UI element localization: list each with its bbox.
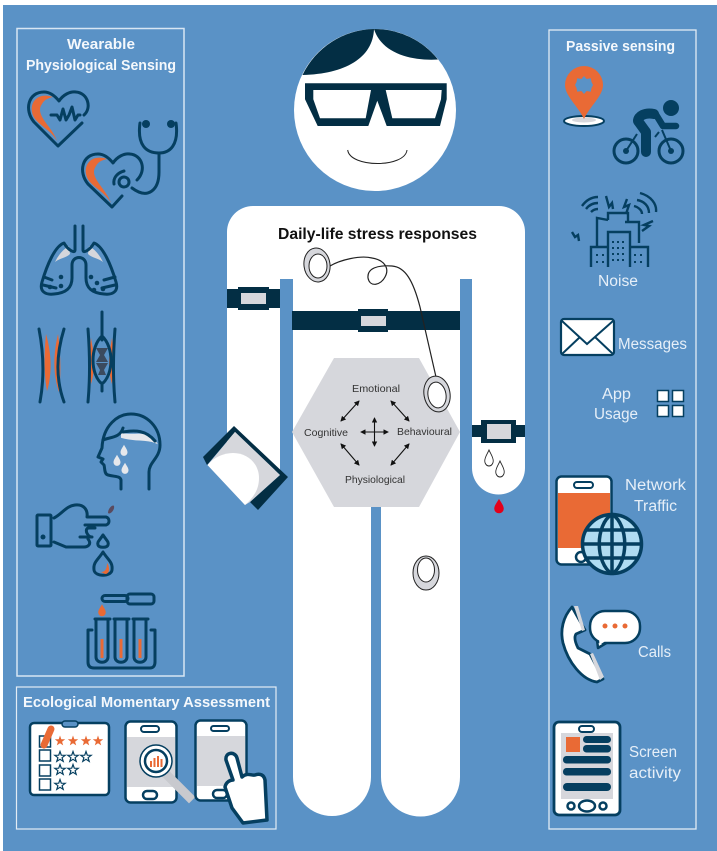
icon: heart with stethoscope — [83, 120, 177, 207]
icon: phone screen activity — [554, 722, 620, 815]
heading line 1: Wearable — [67, 37, 135, 53]
thigh sensor — [413, 556, 439, 590]
torso and limbs — [227, 206, 525, 817]
label: Emotional: Emotional — [352, 383, 400, 395]
panel: ecological momentary assessment — [16, 687, 276, 829]
panel: wearable physiological sensing — [17, 28, 184, 676]
icon: constricted blood vessel — [88, 312, 115, 402]
head — [294, 29, 456, 191]
smile — [348, 150, 407, 164]
label: Noise: Noise — [598, 273, 638, 290]
icon: telephone — [562, 606, 604, 682]
icon: phone with magnifier — [126, 722, 189, 802]
icon: speech bubble — [590, 611, 640, 648]
stress response hexagon — [292, 358, 460, 507]
label: Cognitive: Cognitive — [304, 427, 348, 439]
heading: Passive sensing — [566, 39, 675, 55]
wired sensor: electrodes and wire — [302, 246, 453, 414]
hair — [302, 29, 438, 75]
icon: phone with globe — [556, 476, 642, 574]
icon: location pin — [564, 66, 604, 126]
left arm band — [227, 287, 280, 310]
wrist band — [472, 420, 525, 443]
icon: rating clipboard — [30, 721, 109, 795]
icon: cyclist — [614, 100, 683, 163]
icon: noisy city — [572, 193, 656, 267]
person figure — [203, 29, 525, 817]
icon: test tubes and pipette — [88, 594, 155, 668]
icon: app grid — [658, 390, 684, 416]
label: Network: Network — [625, 477, 686, 494]
icon: head with sweat — [98, 414, 160, 489]
label: Usage: Usage — [594, 406, 638, 423]
title: Daily-life stress responses — [278, 226, 477, 243]
label: Calls: Calls — [638, 644, 671, 661]
label: Screen: Screen — [629, 744, 677, 761]
icon: finger prick hand — [37, 505, 114, 575]
chest band — [292, 309, 460, 332]
icon: lungs — [41, 226, 117, 294]
label: Traffic: Traffic — [634, 498, 677, 515]
heading line 2: Physiological Sensing — [26, 58, 176, 74]
icon: heart with pulse — [29, 92, 88, 146]
arrows between responses — [341, 401, 409, 465]
tablet in hand — [203, 426, 288, 510]
label: Behavioural: Behavioural — [397, 426, 452, 438]
panel: passive sensing — [549, 30, 696, 829]
label: Messages: Messages — [618, 336, 687, 353]
sweat drops — [485, 450, 504, 477]
icon: envelope — [561, 319, 614, 355]
heading: Ecological Momentary Assessment — [23, 695, 270, 711]
label: activity: activity — [629, 765, 681, 782]
label: App: App — [602, 386, 631, 403]
icon: normal blood vessel — [39, 329, 64, 402]
icon: phone with pointing hand — [196, 720, 267, 823]
blood drop — [494, 499, 504, 513]
label: Physiological: Physiological — [345, 474, 405, 486]
glasses — [305, 83, 447, 126]
